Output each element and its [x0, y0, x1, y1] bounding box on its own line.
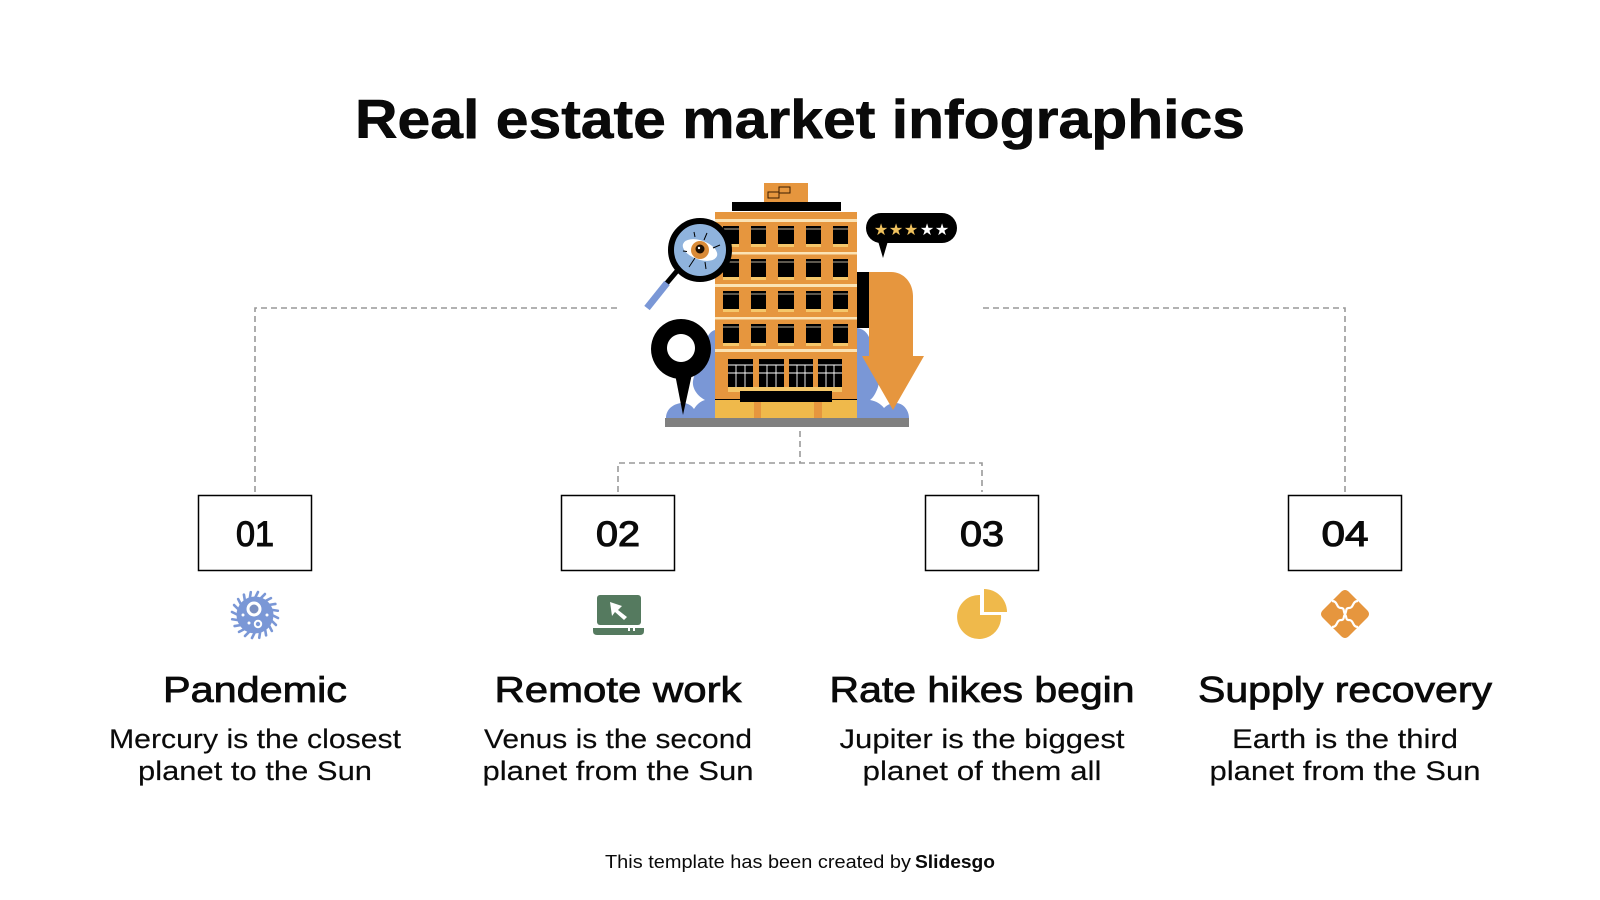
number box 01: 01	[236, 515, 274, 554]
blue bushes	[666, 328, 909, 418]
icon: down arrow	[857, 272, 924, 410]
description: planet of them all	[862, 756, 1102, 786]
description: Venus is the second	[484, 724, 752, 754]
number box 02: 02	[596, 515, 640, 554]
number box 02	[562, 496, 674, 570]
description: planet from the Sun	[1210, 756, 1480, 786]
connector: building to 04	[983, 308, 1345, 492]
heading: Rate hikes begin	[830, 669, 1134, 710]
description	[109, 724, 402, 786]
number box 03	[926, 496, 1038, 570]
number box 03: 03	[960, 515, 1004, 554]
icon: rating speech bubble: ★	[904, 220, 918, 239]
icon: rating speech bubble: ★	[935, 220, 949, 239]
heading: Pandemic	[163, 669, 347, 710]
icon: location pin	[651, 319, 711, 415]
icon: virus	[232, 592, 278, 638]
number box 04	[1288, 496, 1402, 570]
footer credit: This template has been created by	[605, 852, 911, 872]
icon: pie chart	[957, 589, 1007, 639]
description: Mercury is the closest	[109, 724, 402, 754]
step 02	[482, 496, 754, 786]
description: planet from the Sun	[482, 756, 754, 786]
heading: Supply recovery	[1198, 669, 1492, 710]
ground floor windows	[728, 359, 842, 392]
ground	[665, 418, 909, 427]
title: Real estate market infographics	[355, 88, 1245, 150]
description	[482, 724, 754, 786]
step 01	[109, 496, 402, 786]
icon: rating speech bubble: ★	[920, 220, 934, 239]
description	[1210, 724, 1480, 786]
icon: rating speech bubble: ★	[889, 220, 903, 239]
icon: magnifier with eye	[647, 221, 729, 308]
heading: Remote work	[494, 669, 743, 710]
description: planet to the Sun	[138, 756, 372, 786]
icon: laptop with cursor	[593, 595, 644, 635]
number box 01	[198, 496, 312, 570]
number box 04: 04	[1322, 515, 1368, 554]
upper windows	[723, 226, 848, 346]
step 03	[830, 496, 1134, 786]
description: Earth is the third	[1232, 724, 1458, 754]
connector: building to 02 and 03	[618, 431, 982, 492]
icon: rating speech bubble	[866, 213, 957, 258]
illustration: building with icons	[647, 183, 957, 427]
connector: building to 01	[255, 308, 617, 492]
footer credit: Slidesgo	[915, 852, 995, 872]
icon: rating speech bubble: ★	[874, 220, 888, 239]
icon: puzzle	[1321, 590, 1369, 638]
building body	[715, 183, 857, 418]
step 04	[1198, 496, 1492, 786]
description: Jupiter is the biggest	[840, 724, 1125, 754]
awning	[740, 391, 832, 402]
description	[840, 724, 1125, 786]
